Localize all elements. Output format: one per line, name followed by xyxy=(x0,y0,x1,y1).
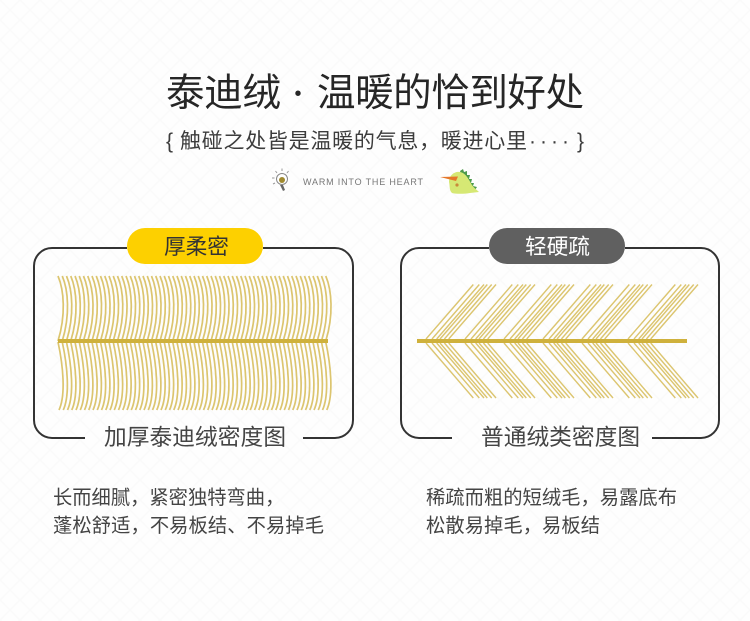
subtitle: { xyxy=(166,130,173,153)
text block: thick fur description: 蓬松舒适，不易板结、不易掉毛 xyxy=(53,515,324,537)
panel: hard stiff sparse xyxy=(401,228,719,450)
text block: ordinary fur description xyxy=(426,487,677,537)
title: 泰迪绒 xyxy=(166,72,281,115)
subtitle: } xyxy=(577,130,584,153)
badge xyxy=(127,228,263,264)
text block: ordinary fur description: 松散易掉毛，易板结 xyxy=(426,515,600,537)
title: • xyxy=(294,83,302,105)
chart caption: 普通绒类密度图 xyxy=(481,424,640,450)
subtitle: ···· xyxy=(529,130,569,153)
panel: thick soft dense xyxy=(34,228,353,450)
icon: green dinosaur xyxy=(440,169,479,194)
icon: light bulb xyxy=(272,168,288,191)
badge: 轻硬疏 xyxy=(525,234,590,259)
badge xyxy=(489,228,625,264)
text block: thick fur description xyxy=(53,487,324,537)
panel frame xyxy=(401,248,719,438)
panel frame xyxy=(34,248,353,438)
badge: 厚柔密 xyxy=(164,234,229,259)
tagline: WARM INTO THE HEART xyxy=(303,177,424,187)
chart: sparse fur strands xyxy=(417,284,698,398)
title: 温暖的恰到好处 xyxy=(317,72,584,115)
title xyxy=(166,72,584,115)
subtitle: 触碰之处皆是温暖的气息，暖进心里 xyxy=(180,130,527,153)
text block: thick fur description: 长而细腻，紧密独特弯曲， xyxy=(53,487,284,509)
chart: dense fur strands xyxy=(58,276,331,410)
text block: ordinary fur description: 稀疏而粗的短绒毛，易露底布 xyxy=(426,487,677,509)
chart caption: 加厚泰迪绒密度图 xyxy=(104,424,286,450)
